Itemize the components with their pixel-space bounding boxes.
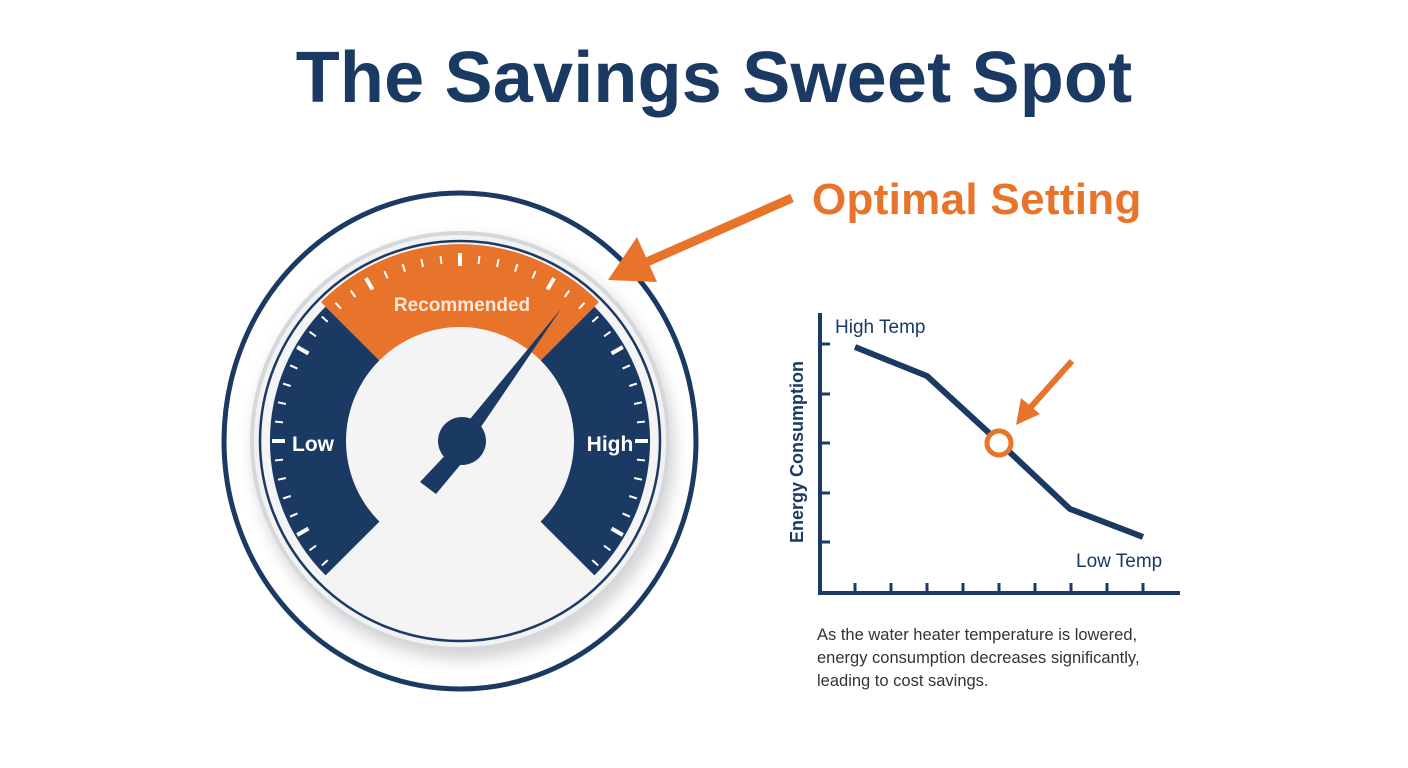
gauge labels: Recommended [394, 295, 530, 316]
caption: energy consumption decreases significantly, [817, 649, 1140, 667]
ticks [272, 253, 648, 565]
label: optimal setting: Optimal Setting [812, 175, 1142, 224]
chart labels: Low Temp [1076, 551, 1162, 572]
needle [420, 309, 561, 494]
chart labels [787, 317, 1162, 572]
caption: leading to cost savings. [817, 672, 989, 690]
arrow to gauge [608, 198, 792, 282]
chart [820, 313, 1180, 593]
dark band right [541, 307, 650, 575]
gauge labels: Low [292, 433, 335, 456]
gauge labels: High [587, 433, 633, 456]
caption [817, 626, 1140, 690]
chart labels: Energy Consumption [787, 361, 807, 543]
chart labels: High Temp [835, 317, 925, 338]
orange band [321, 244, 599, 360]
title: The Savings Sweet Spot [296, 38, 1132, 118]
dark band left [270, 307, 379, 575]
gauge labels [292, 295, 633, 456]
caption: As the water heater temperature is lowered, [817, 626, 1137, 644]
